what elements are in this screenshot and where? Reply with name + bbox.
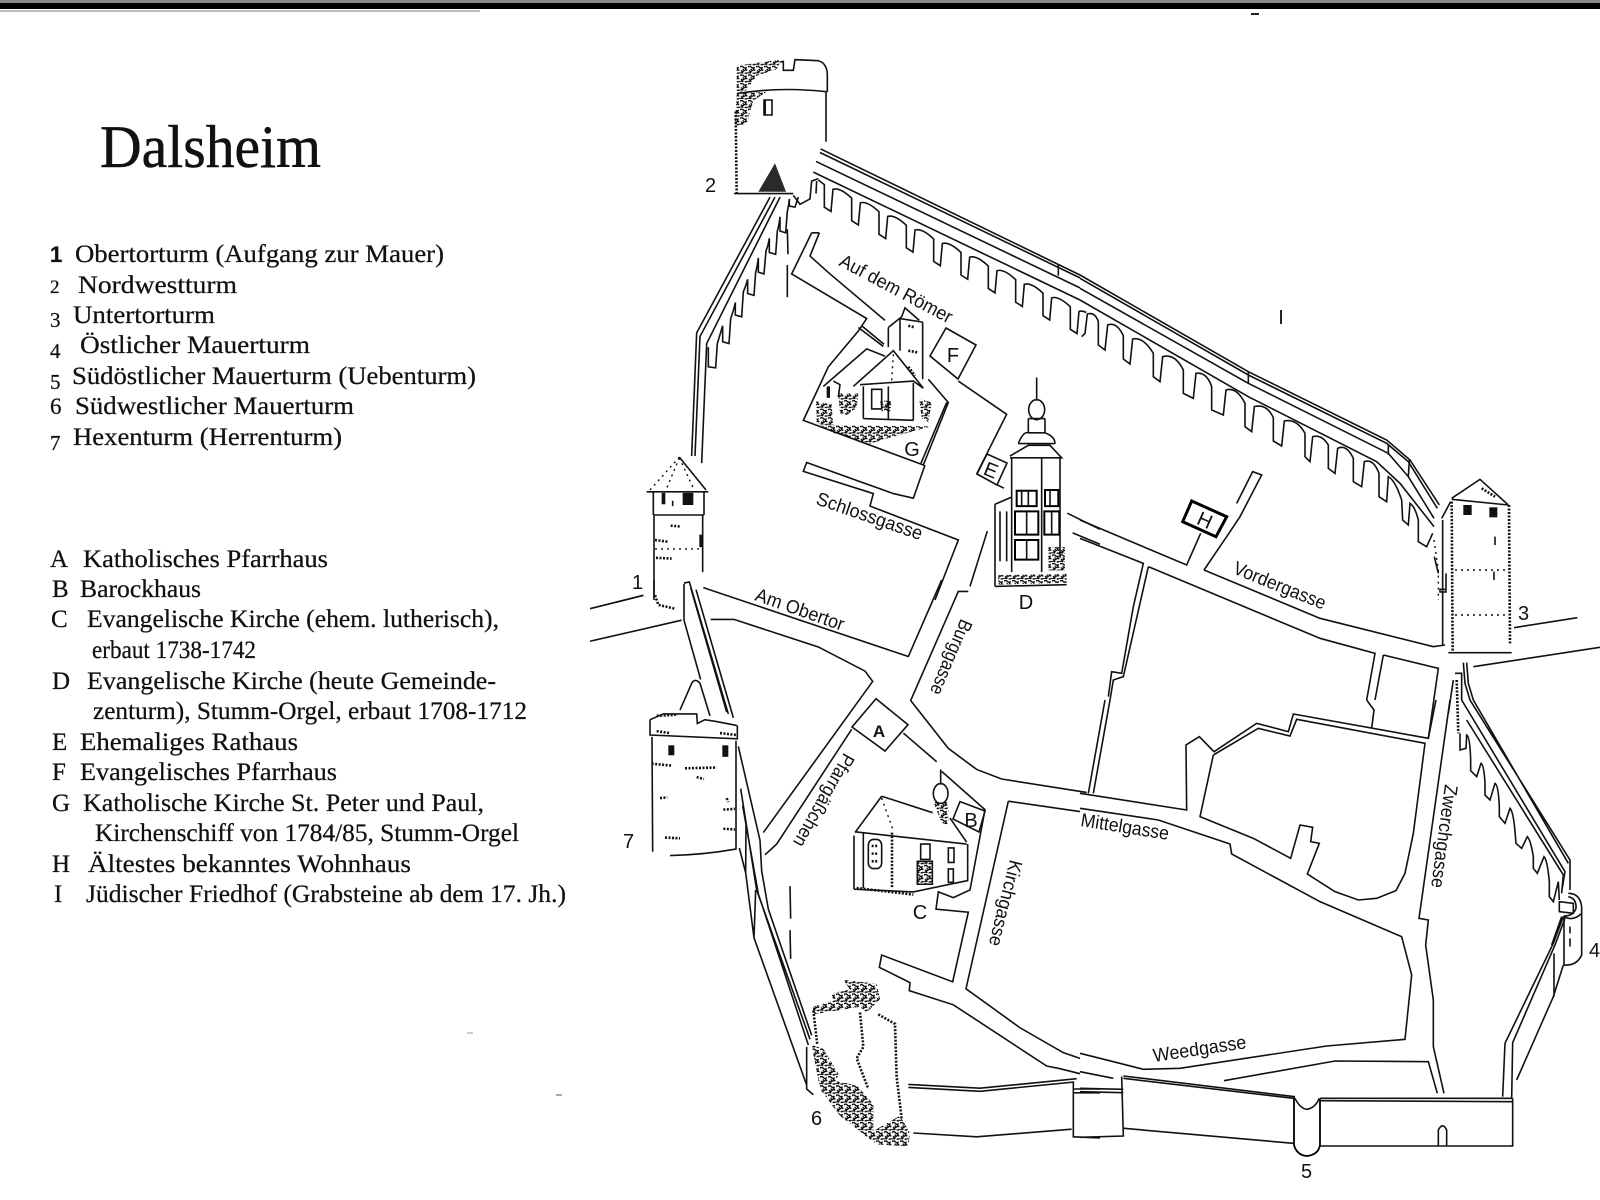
- street names: Kirchgasse: [984, 858, 1026, 948]
- street names: Mittelgasse: [1079, 810, 1170, 845]
- tower number labels: 3: [1518, 603, 1529, 625]
- legend: buildings: B: [52, 576, 69, 603]
- street names: Auf dem Römer: [836, 251, 956, 328]
- legend: buildings: G: [52, 790, 70, 817]
- legend: buildings: [50, 546, 566, 908]
- legend: buildings: Ehemaliges Rathaus: [80, 729, 298, 756]
- building B marker: B: [964, 810, 978, 832]
- tower number labels: 4: [1589, 940, 1600, 962]
- tower number labels: 7: [623, 831, 634, 853]
- street names: Am Obertor: [752, 585, 848, 636]
- building F marker: [930, 328, 976, 379]
- tower 1: [647, 457, 708, 609]
- tower number labels: 5: [1301, 1161, 1312, 1183]
- building B marker: [953, 802, 985, 832]
- legend: buildings: Ältestes bekanntes Wohnhaus: [88, 851, 411, 878]
- legend: buildings: zenturm), Stumm-Orgel, erbaut 1708-1712: [93, 698, 527, 725]
- building E marker: [977, 454, 1007, 485]
- street names: Schlossgasse: [813, 489, 925, 545]
- legend: buildings: E: [52, 729, 67, 756]
- legend: buildings: Kirchenschiff von 1784/85, Stumm-Orgel: [95, 820, 519, 847]
- church G: [816, 308, 932, 444]
- church D: [995, 377, 1067, 586]
- building A marker: [852, 699, 908, 751]
- tower 7: [650, 680, 737, 856]
- street names: Zwerchgasse: [1426, 783, 1461, 889]
- legend: buildings: Barockhaus: [80, 576, 201, 603]
- legend: towers: Hexenturm (Herrenturm): [73, 424, 342, 451]
- legend: buildings: Evangelische Kirche (ehem. lutherisch),: [87, 606, 499, 633]
- street names: Weedgasse: [1152, 1032, 1248, 1067]
- legend: buildings: Evangelisches Pfarrhaus: [80, 759, 337, 786]
- building F marker: F: [947, 345, 959, 367]
- legend: towers: [50, 241, 476, 455]
- tower 5 and south wall: [908, 1076, 1513, 1156]
- legend: towers: 6: [50, 394, 62, 419]
- tower 3: [1442, 479, 1512, 653]
- legend: towers: 2: [50, 277, 60, 298]
- building H marker: [1183, 501, 1227, 537]
- church C: [854, 769, 968, 895]
- building C label: C: [913, 902, 927, 924]
- legend: buildings: Katholische Kirche St. Peter und Paul,: [83, 790, 484, 817]
- legend: buildings: I: [54, 881, 62, 908]
- legend: towers: 4: [50, 339, 61, 363]
- legend: towers: 1: [50, 242, 62, 267]
- legend: buildings: Katholisches Pfarrhaus: [83, 546, 328, 573]
- legend: buildings: Jüdischer Friedhof (Grabsteine ab dem 17. Jh.): [86, 881, 566, 908]
- legend: towers: Südwestlicher Mauerturm: [75, 393, 355, 420]
- tower number labels: 1: [632, 572, 643, 594]
- legend: towers: Östlicher Mauerturm: [80, 332, 311, 359]
- legend: buildings: Evangelische Kirche (heute Gemeinde-: [87, 668, 496, 695]
- legend: buildings: F: [52, 759, 66, 786]
- legend: towers: Untertorturm: [73, 302, 216, 329]
- title: Dalsheim: [100, 114, 321, 180]
- legend: buildings: A: [50, 546, 68, 573]
- building G label: G: [904, 439, 920, 461]
- tower number labels: [623, 175, 1600, 1183]
- west wall: [692, 197, 798, 463]
- tower 2: [734, 60, 827, 194]
- tower number labels: 2: [705, 175, 716, 197]
- legend: buildings: D: [52, 668, 70, 695]
- legend: towers: 5: [50, 370, 60, 394]
- building D label: D: [1019, 592, 1033, 614]
- south-west wall: [684, 582, 813, 1095]
- cemetery label I: I: [1278, 307, 1284, 329]
- legend: towers: 7: [50, 431, 60, 455]
- street names: [752, 251, 1461, 1067]
- street names: Vordergasse: [1230, 558, 1329, 614]
- street names: Burggasse: [925, 616, 976, 698]
- east wall and tower 4: [1448, 663, 1582, 1098]
- legend: towers: 3: [50, 308, 60, 332]
- legend: buildings: erbaut 1738-1742: [92, 637, 256, 664]
- legend: buildings: C: [51, 606, 68, 633]
- building E marker: E: [980, 458, 1001, 484]
- streets: [590, 233, 1600, 1093]
- legend: towers: Südöstlicher Mauerturm (Uebenturm): [72, 363, 476, 390]
- tower 6: [812, 980, 910, 1146]
- north wall: [793, 149, 1446, 600]
- building H marker: H: [1194, 508, 1216, 534]
- building A marker: A: [873, 722, 885, 741]
- street names: Pfarrgäßchen: [788, 750, 858, 850]
- legend: towers: Nordwestturm: [78, 272, 238, 299]
- legend: buildings: H: [52, 851, 70, 878]
- tower number labels: 6: [811, 1108, 822, 1130]
- legend: towers: Obertorturm (Aufgang zur Mauer): [75, 241, 444, 268]
